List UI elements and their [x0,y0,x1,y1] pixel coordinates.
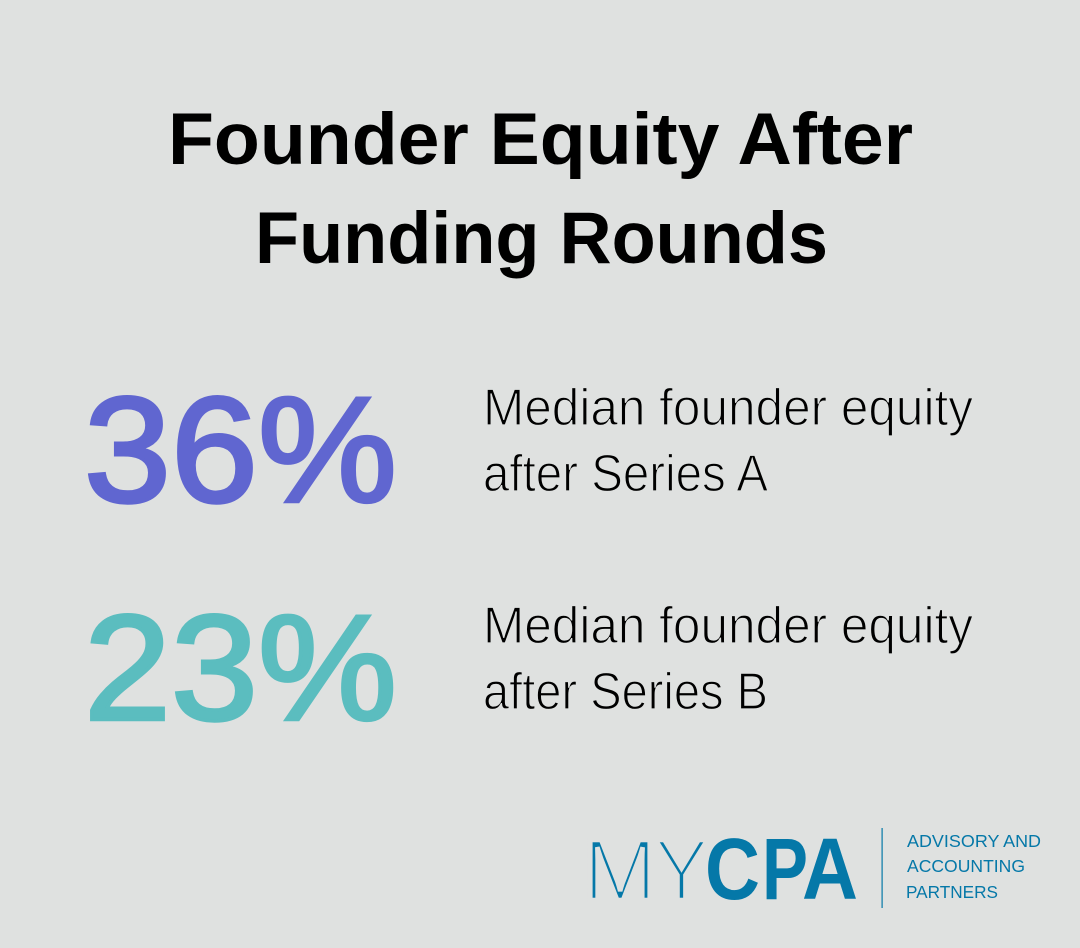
logo wordmark: P [762,821,808,918]
description: Series B [483,597,973,721]
logo wordmark [583,821,858,919]
logo tagline [906,831,1041,902]
description: Series A: after Series A [483,445,768,503]
logo: MYCPA advisory and accounting partners [583,821,1041,919]
description: Series A [483,379,973,503]
title: Founder Equity After [168,99,913,180]
title: Funding Rounds [255,198,828,279]
logo tagline: ACCOUNTING [907,856,1025,876]
description: Series B: after Series B [483,663,768,721]
title [168,99,913,279]
logo tagline: ADVISORY AND [907,831,1041,851]
logo wordmark: M [583,822,657,919]
stat: 36 percent: 36% [84,366,397,534]
logo wordmark: A [802,821,858,918]
logo wordmark: C [705,821,760,918]
logo tagline: PARTNERS [906,882,998,902]
logo divider [882,828,883,908]
description: Series A: Median founder equity [483,379,973,437]
description: Series B: Median founder equity [483,597,973,655]
stat: 23 percent: 23% [84,584,397,752]
logo wordmark: Y [654,822,709,919]
